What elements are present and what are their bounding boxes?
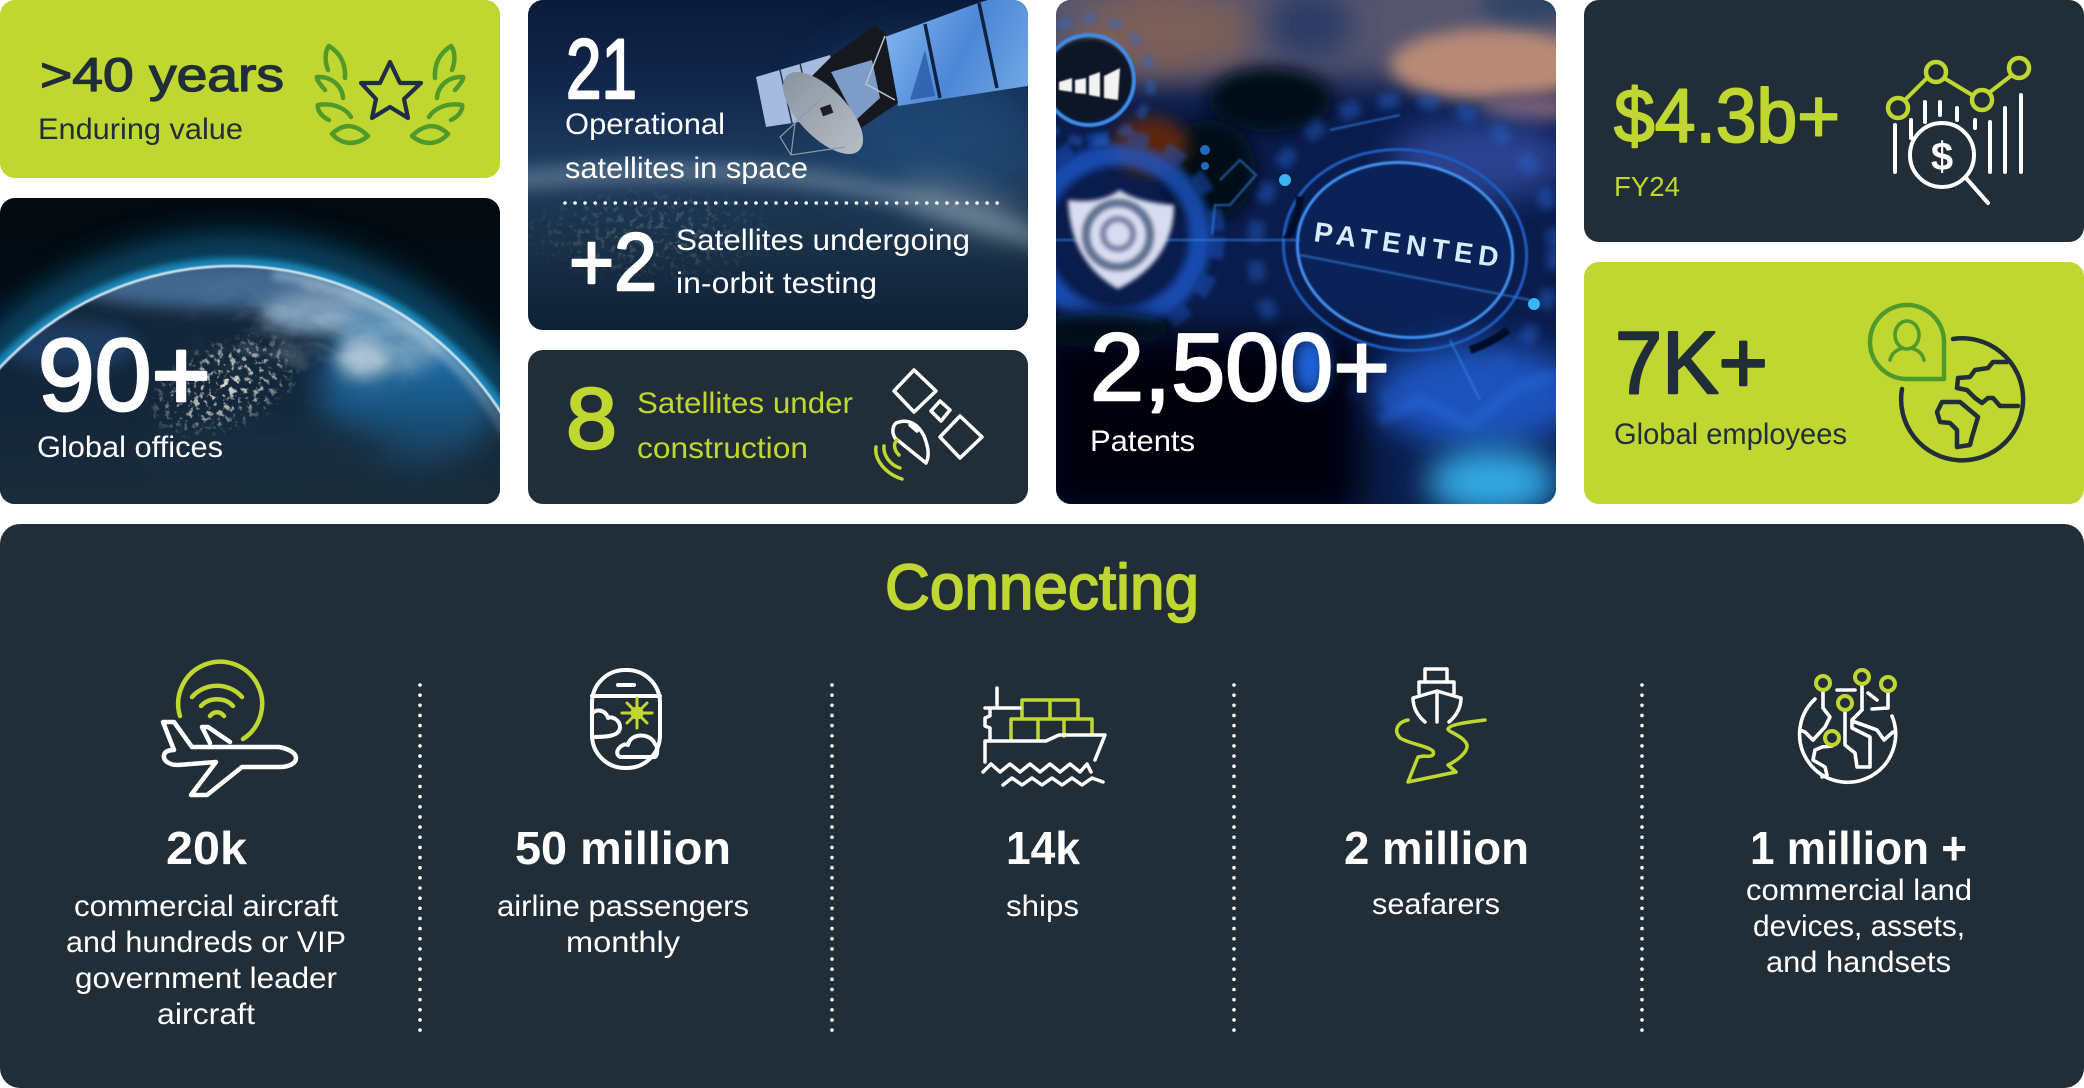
- description: land devices: devices, assets,: [1753, 910, 1965, 943]
- heading: >40 years: >40 years: [40, 48, 284, 101]
- illustration: chart bars: [1059, 68, 1120, 100]
- number: $4.3b+: $4.3b+: [1614, 74, 1840, 159]
- description: seafarers: seafarers: [1372, 888, 1500, 921]
- number: 2,500+: 2,500+: [1090, 314, 1390, 421]
- description: land devices: commercial land: [1746, 874, 1972, 907]
- description: aircraft: aircraft: [157, 998, 256, 1031]
- heading: connecting: Connecting: [885, 551, 1199, 623]
- icon: connected globe: [1800, 670, 1896, 782]
- description: land devices: [1746, 874, 1972, 979]
- description: aircraft: [66, 890, 346, 1031]
- column: aircraft: [66, 662, 346, 1031]
- stat: 50 million: 50 million: [515, 822, 731, 874]
- panel: revenue: [1584, 0, 2084, 242]
- icon: ship on winding route: [1397, 669, 1485, 782]
- stat: 2 million: 2 million: [1344, 822, 1529, 874]
- icon: plane with wifi: [163, 662, 296, 795]
- text: PATENTED stamp: PATENTED: [1312, 216, 1501, 273]
- panel: enduring value: [0, 0, 500, 178]
- number: +2: +2: [569, 217, 657, 308]
- label: satellites under construction: Satellites under: [637, 387, 853, 420]
- label: operational satellites in space: [565, 108, 808, 185]
- column: passengers: [497, 670, 749, 959]
- illustration: shield: [1068, 190, 1174, 289]
- label: global offices: Global offices: [37, 431, 223, 464]
- number: 90+: 90+: [38, 318, 211, 432]
- stat: 20k: 20k: [166, 822, 247, 874]
- number: 7K+: 7K+: [1615, 313, 1768, 412]
- label: satellites under construction: [637, 387, 853, 465]
- panel: global employees: [1584, 262, 2084, 504]
- column: land devices: [1746, 670, 1972, 979]
- stat: 14k: 14k: [1006, 822, 1080, 874]
- label: operational satellites in space: satellites in space: [565, 152, 808, 185]
- description: passengers: [497, 890, 749, 959]
- panel: patents: [1056, 0, 1556, 504]
- label: enduring value: Enduring value: [38, 113, 243, 146]
- label: operational satellites in space: Operational: [565, 108, 725, 141]
- icon: employee globe: [1870, 305, 2023, 460]
- label: satellites under construction: construction: [637, 432, 808, 465]
- label: global employees: Global employees: [1614, 418, 1847, 451]
- label: satellites undergoing in-orbit testing: [676, 224, 970, 300]
- illustration: satellite: [756, 0, 1028, 156]
- description: ships: ships: [1006, 890, 1079, 923]
- label: FY24: FY24: [1614, 171, 1680, 202]
- label: satellites undergoing in-orbit testing: Satellites undergoing: [676, 224, 970, 257]
- panel: operational satellites: [500, 0, 1050, 330]
- description: aircraft: government leader: [75, 962, 337, 995]
- icon: satellite: [876, 370, 982, 479]
- icon: airplane window: [592, 670, 660, 768]
- description: aircraft: and hundreds or VIP: [66, 926, 346, 959]
- illustration: gears: [1018, 18, 1555, 400]
- description: aircraft: commercial aircraft: [74, 890, 339, 923]
- description: passengers: airline passengers: [497, 890, 749, 923]
- illustration: patent ring: [1056, 115, 1540, 400]
- label: patents: Patents: [1090, 425, 1195, 458]
- panel: global offices: [0, 198, 500, 504]
- icon: revenue chart: $: [1931, 135, 1953, 179]
- column: ships: [983, 688, 1105, 923]
- number: 8: 8: [566, 371, 617, 467]
- icon: container ship: [983, 688, 1105, 785]
- panel: connecting: [0, 524, 2084, 1088]
- column: seafarers: [1344, 669, 1529, 921]
- icon: revenue chart: [1888, 58, 2029, 203]
- stat: 1 million +: 1 million +: [1750, 822, 1967, 874]
- icon: laurel and star: [317, 46, 463, 143]
- number: 21: 21: [566, 22, 637, 116]
- description: passengers: monthly: [566, 926, 680, 959]
- panel: satellites under construction: [528, 350, 1028, 504]
- label: satellites undergoing in-orbit testing: in-orbit testing: [676, 267, 877, 300]
- description: land devices: and handsets: [1766, 946, 1951, 979]
